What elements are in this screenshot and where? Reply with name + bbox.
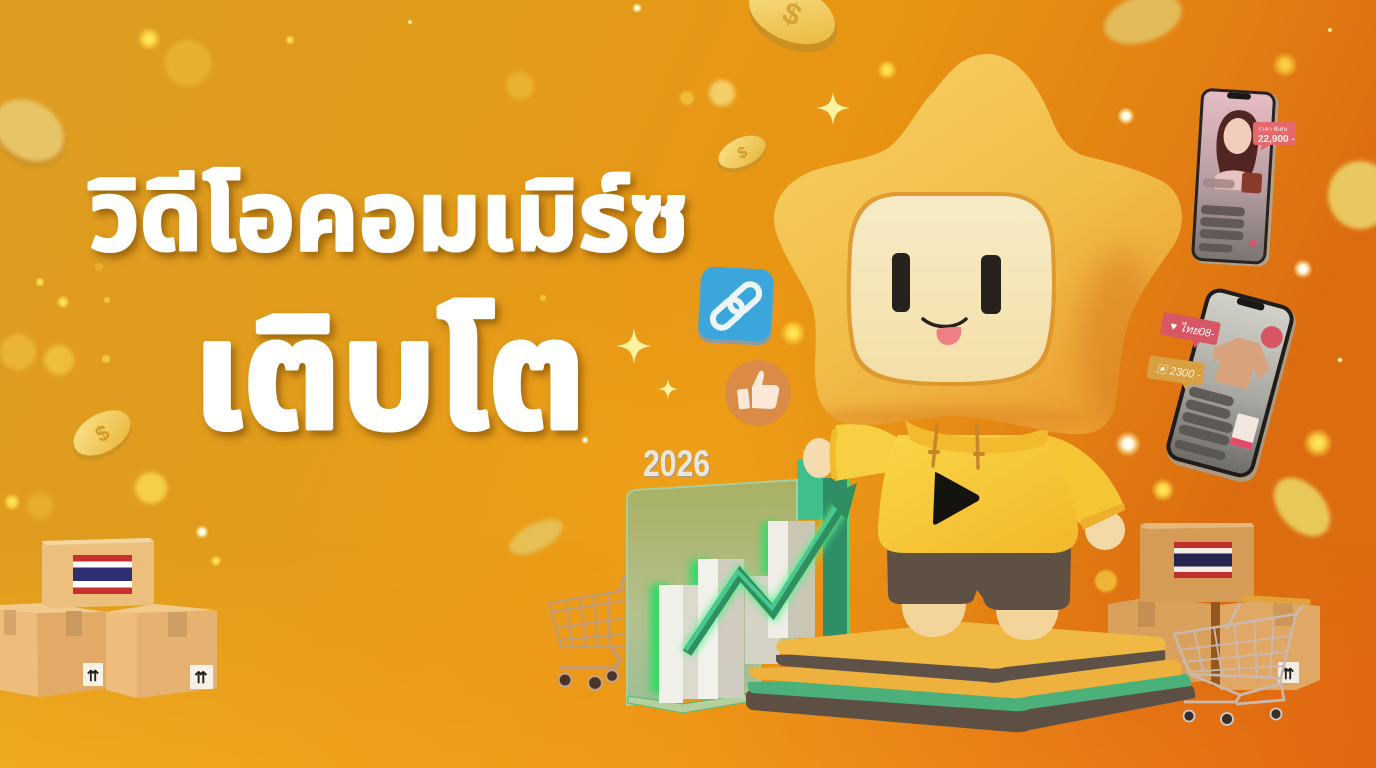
growth arrow xyxy=(686,483,857,653)
callout: red: ♥ ไทย08- xyxy=(1169,319,1216,341)
platform xyxy=(746,622,1195,732)
mouth xyxy=(923,319,966,326)
box: top with flag xyxy=(1140,523,1254,602)
boxes: left stack xyxy=(0,538,217,698)
coin: near link icon xyxy=(713,129,771,179)
phone: bottom shopping xyxy=(1162,285,1300,485)
box: back right: ⇈ xyxy=(1282,666,1295,683)
sparkles xyxy=(616,92,850,399)
legs xyxy=(902,600,1059,640)
title xyxy=(89,147,689,498)
year label: 2026 xyxy=(644,444,711,485)
coin: top center xyxy=(740,0,846,64)
shopping cart: right xyxy=(1174,598,1308,725)
callout: red xyxy=(1158,312,1221,352)
coin: center xyxy=(504,512,568,562)
sale badge xyxy=(1258,324,1285,351)
torso hoodie xyxy=(878,435,1078,553)
callout: price: 22,900 - xyxy=(1258,134,1295,145)
title line 2: เติบโต xyxy=(193,266,586,498)
title line 1: วิดีโอคอมเมิร์ซ xyxy=(89,147,689,295)
wheels xyxy=(1184,708,1282,725)
chat rows xyxy=(1198,178,1260,254)
coin: near link icon: $ xyxy=(735,144,750,163)
face opening xyxy=(847,192,1056,386)
chat rows xyxy=(1174,386,1241,461)
box: bottom right: ⇈ xyxy=(194,670,208,687)
phone: top live stream xyxy=(1191,88,1279,267)
back green bars xyxy=(797,460,823,520)
layer: yellow middle xyxy=(750,660,1181,698)
product card xyxy=(1230,413,1259,450)
coin: top right xyxy=(1098,0,1188,53)
shirt xyxy=(1206,332,1275,394)
coin: right edge xyxy=(1328,161,1376,229)
box: bottom left xyxy=(0,603,106,697)
box: back right xyxy=(1220,600,1320,690)
box: back left xyxy=(1108,597,1211,688)
bar 2 xyxy=(698,559,744,699)
chart panel xyxy=(627,443,857,713)
layer: bottom dark xyxy=(746,684,1195,732)
base xyxy=(628,694,748,713)
icon: link tile xyxy=(697,266,775,346)
coin: lower left: $ xyxy=(91,420,114,447)
notch xyxy=(1227,92,1251,100)
bar 1 xyxy=(659,585,708,703)
bar 4 xyxy=(768,521,815,638)
hood collar xyxy=(905,420,1050,453)
glass board xyxy=(627,480,797,705)
handle xyxy=(1244,598,1308,602)
layer: top dark xyxy=(776,645,1165,683)
callout: price: ราคา พิเศษ xyxy=(1258,126,1287,133)
eyes xyxy=(892,253,1001,314)
play icon xyxy=(933,472,980,525)
coin: lower right xyxy=(1263,467,1341,547)
chart panel: 2026 xyxy=(643,443,710,484)
mascot xyxy=(774,54,1182,640)
callout: gold: ▣ 2300 - xyxy=(1155,363,1202,382)
left arm xyxy=(803,424,900,481)
right arm xyxy=(1040,434,1125,550)
coin: lower left xyxy=(64,401,140,470)
bokeh lights xyxy=(0,3,1343,592)
boxes: right stack xyxy=(1108,523,1320,690)
star head xyxy=(774,54,1182,434)
coins xyxy=(0,0,1376,562)
coin: top left xyxy=(0,87,78,182)
streamer xyxy=(1214,109,1260,191)
bars xyxy=(659,521,815,703)
product thumb xyxy=(1241,172,1262,194)
layer: green xyxy=(748,674,1191,711)
box: bottom right xyxy=(106,604,217,698)
callout: price xyxy=(1253,122,1296,151)
face xyxy=(851,196,1052,382)
box: top with flag xyxy=(42,538,154,608)
shorts xyxy=(887,548,1071,610)
icon: thumbs up xyxy=(725,360,791,426)
box: bottom left: ⇈ xyxy=(87,668,100,685)
tongue xyxy=(937,327,961,345)
wheels xyxy=(558,670,618,690)
shopping cart: left xyxy=(549,575,628,690)
bar 3 xyxy=(745,576,780,664)
callout: gold xyxy=(1146,355,1205,392)
layer: top yellow xyxy=(776,622,1165,669)
drawstrings xyxy=(930,425,983,468)
bar glow xyxy=(650,522,778,694)
